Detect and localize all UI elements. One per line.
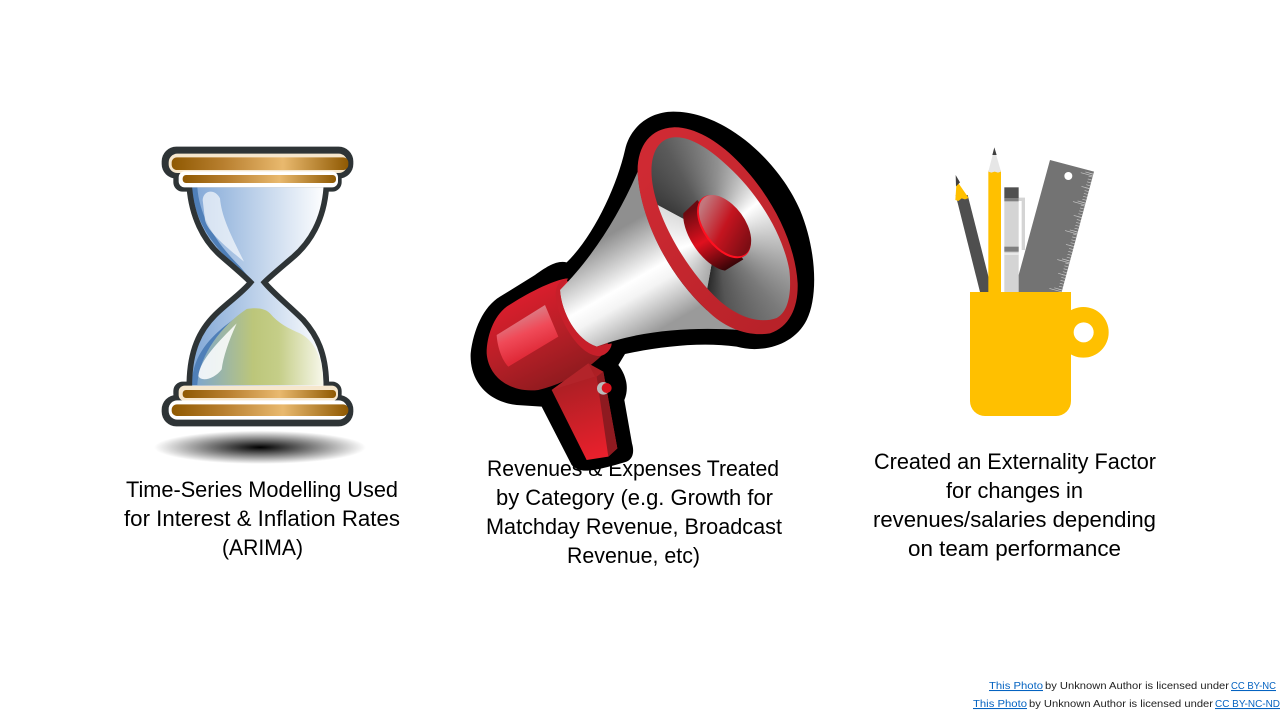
icon: pencil cup bbox=[955, 147, 1109, 416]
text: revenues and expenses: Revenue, etc) bbox=[567, 543, 700, 568]
credit line 1: by Unknown Author is licensed under bbox=[1045, 680, 1230, 692]
megaphone speaker bbox=[683, 185, 762, 271]
megaphone motor housing bbox=[487, 278, 610, 390]
hourglass highlights bbox=[198, 192, 244, 379]
text: revenues and expenses: by Category (e.g. Growth for bbox=[496, 485, 773, 510]
hourglass bottom cap bbox=[169, 386, 348, 420]
credit line 2: by Unknown Author is licensed under bbox=[1029, 698, 1214, 710]
hourglass top cap bbox=[169, 154, 348, 187]
hourglass cap backing bbox=[162, 147, 353, 426]
mug body bbox=[970, 292, 1071, 416]
icon: megaphone bbox=[471, 112, 814, 471]
megaphone bell rim bbox=[638, 127, 798, 334]
text: externality factor bbox=[873, 449, 1156, 561]
pen bbox=[1004, 187, 1023, 292]
text: externality factor: revenues/salaries depending bbox=[873, 507, 1156, 532]
credit line 2: This Photo bbox=[973, 698, 1027, 710]
megaphone cone bbox=[560, 172, 740, 347]
text: revenues and expenses bbox=[486, 456, 782, 568]
megaphone collar bbox=[556, 278, 612, 356]
text: externality factor: on team performance bbox=[908, 536, 1121, 561]
text: revenues and expenses: Revenues & Expenses Treated bbox=[487, 456, 779, 481]
hourglass outline bbox=[189, 187, 326, 386]
text: time-series modelling: Time-Series Modelling Used bbox=[126, 477, 398, 502]
text: time-series modelling bbox=[124, 477, 400, 560]
credit line 1: This Photo bbox=[989, 680, 1043, 692]
megaphone handle bbox=[552, 363, 617, 460]
mug handle bbox=[1058, 307, 1109, 358]
credit line 1: CC BY-NC bbox=[1231, 680, 1276, 692]
text: time-series modelling: for Interest & Inflation Rates bbox=[124, 506, 400, 531]
hourglass glass body bbox=[189, 187, 326, 386]
credit line 1 bbox=[989, 680, 1276, 692]
text: time-series modelling: (ARIMA) bbox=[222, 535, 303, 560]
photo credits bbox=[973, 680, 1280, 710]
ruler bbox=[1019, 160, 1094, 292]
text: externality factor: Created an Externality Factor bbox=[874, 449, 1156, 474]
megaphone button bbox=[597, 382, 612, 395]
megaphone black outline bbox=[471, 112, 814, 471]
credit line 2 bbox=[973, 698, 1280, 710]
hourglass shadow bbox=[154, 431, 366, 464]
housing highlight bbox=[497, 305, 558, 367]
text: externality factor: for changes in bbox=[946, 478, 1083, 503]
hourglass sand bbox=[197, 308, 323, 385]
icon: hourglass bbox=[154, 147, 366, 464]
text: revenues and expenses: Matchday Revenue, Broadcast bbox=[486, 514, 782, 539]
hourglass blue edge shading bbox=[192, 187, 248, 385]
centre pencil bbox=[988, 147, 1001, 292]
megaphone bell interior bbox=[652, 137, 790, 320]
left pencil bbox=[955, 175, 992, 292]
